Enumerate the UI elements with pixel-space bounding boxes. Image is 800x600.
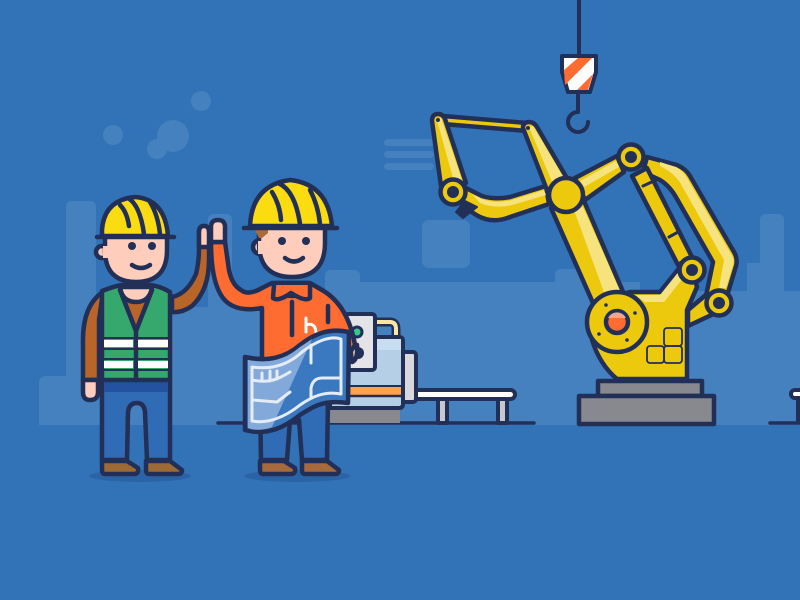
parallel strut <box>632 168 692 265</box>
main lower arm <box>551 201 624 303</box>
robot body <box>592 267 697 379</box>
head <box>253 226 325 277</box>
conveyor table <box>412 390 515 423</box>
hard hat <box>244 180 337 228</box>
shoes <box>102 461 182 474</box>
gripper <box>456 201 477 218</box>
yellow pipe <box>372 322 396 340</box>
raised arm <box>172 226 209 312</box>
robot plinth <box>579 381 714 424</box>
robot arm <box>432 114 737 424</box>
crane hook <box>562 0 596 132</box>
trousers <box>102 380 170 460</box>
rear joint <box>706 290 732 316</box>
right rear link <box>643 157 737 296</box>
vest <box>102 285 170 380</box>
factory silhouette background <box>39 91 800 425</box>
machine body <box>330 337 403 408</box>
back hand <box>350 345 357 362</box>
rear small bracket <box>688 294 722 326</box>
elbow joint <box>549 178 583 212</box>
blueprint <box>245 331 349 432</box>
machine side tab <box>400 352 416 402</box>
worker two with orange shirt <box>211 180 357 474</box>
curved forearm <box>462 186 549 220</box>
trousers <box>260 400 328 460</box>
shoes <box>260 461 339 474</box>
upper right joint <box>618 144 644 170</box>
left wrist link <box>432 114 466 186</box>
machine base <box>328 410 400 423</box>
worker shadows <box>89 470 350 482</box>
ground lines <box>218 421 800 425</box>
left sleeve and hand <box>83 292 103 400</box>
wrist joint <box>440 180 466 204</box>
orange shirt and raised arm <box>211 220 355 360</box>
upper strut <box>575 156 624 200</box>
worker one with green vest <box>83 197 209 474</box>
base rotor with red button <box>587 292 647 352</box>
conveyor machine <box>328 314 515 423</box>
control panel <box>345 314 375 370</box>
head <box>96 236 167 282</box>
hard hat <box>97 197 174 237</box>
strut lower joint <box>680 258 704 282</box>
wrist top bar <box>443 116 527 131</box>
upper forearm <box>523 122 568 190</box>
right edge conveyor fragment <box>791 390 800 423</box>
